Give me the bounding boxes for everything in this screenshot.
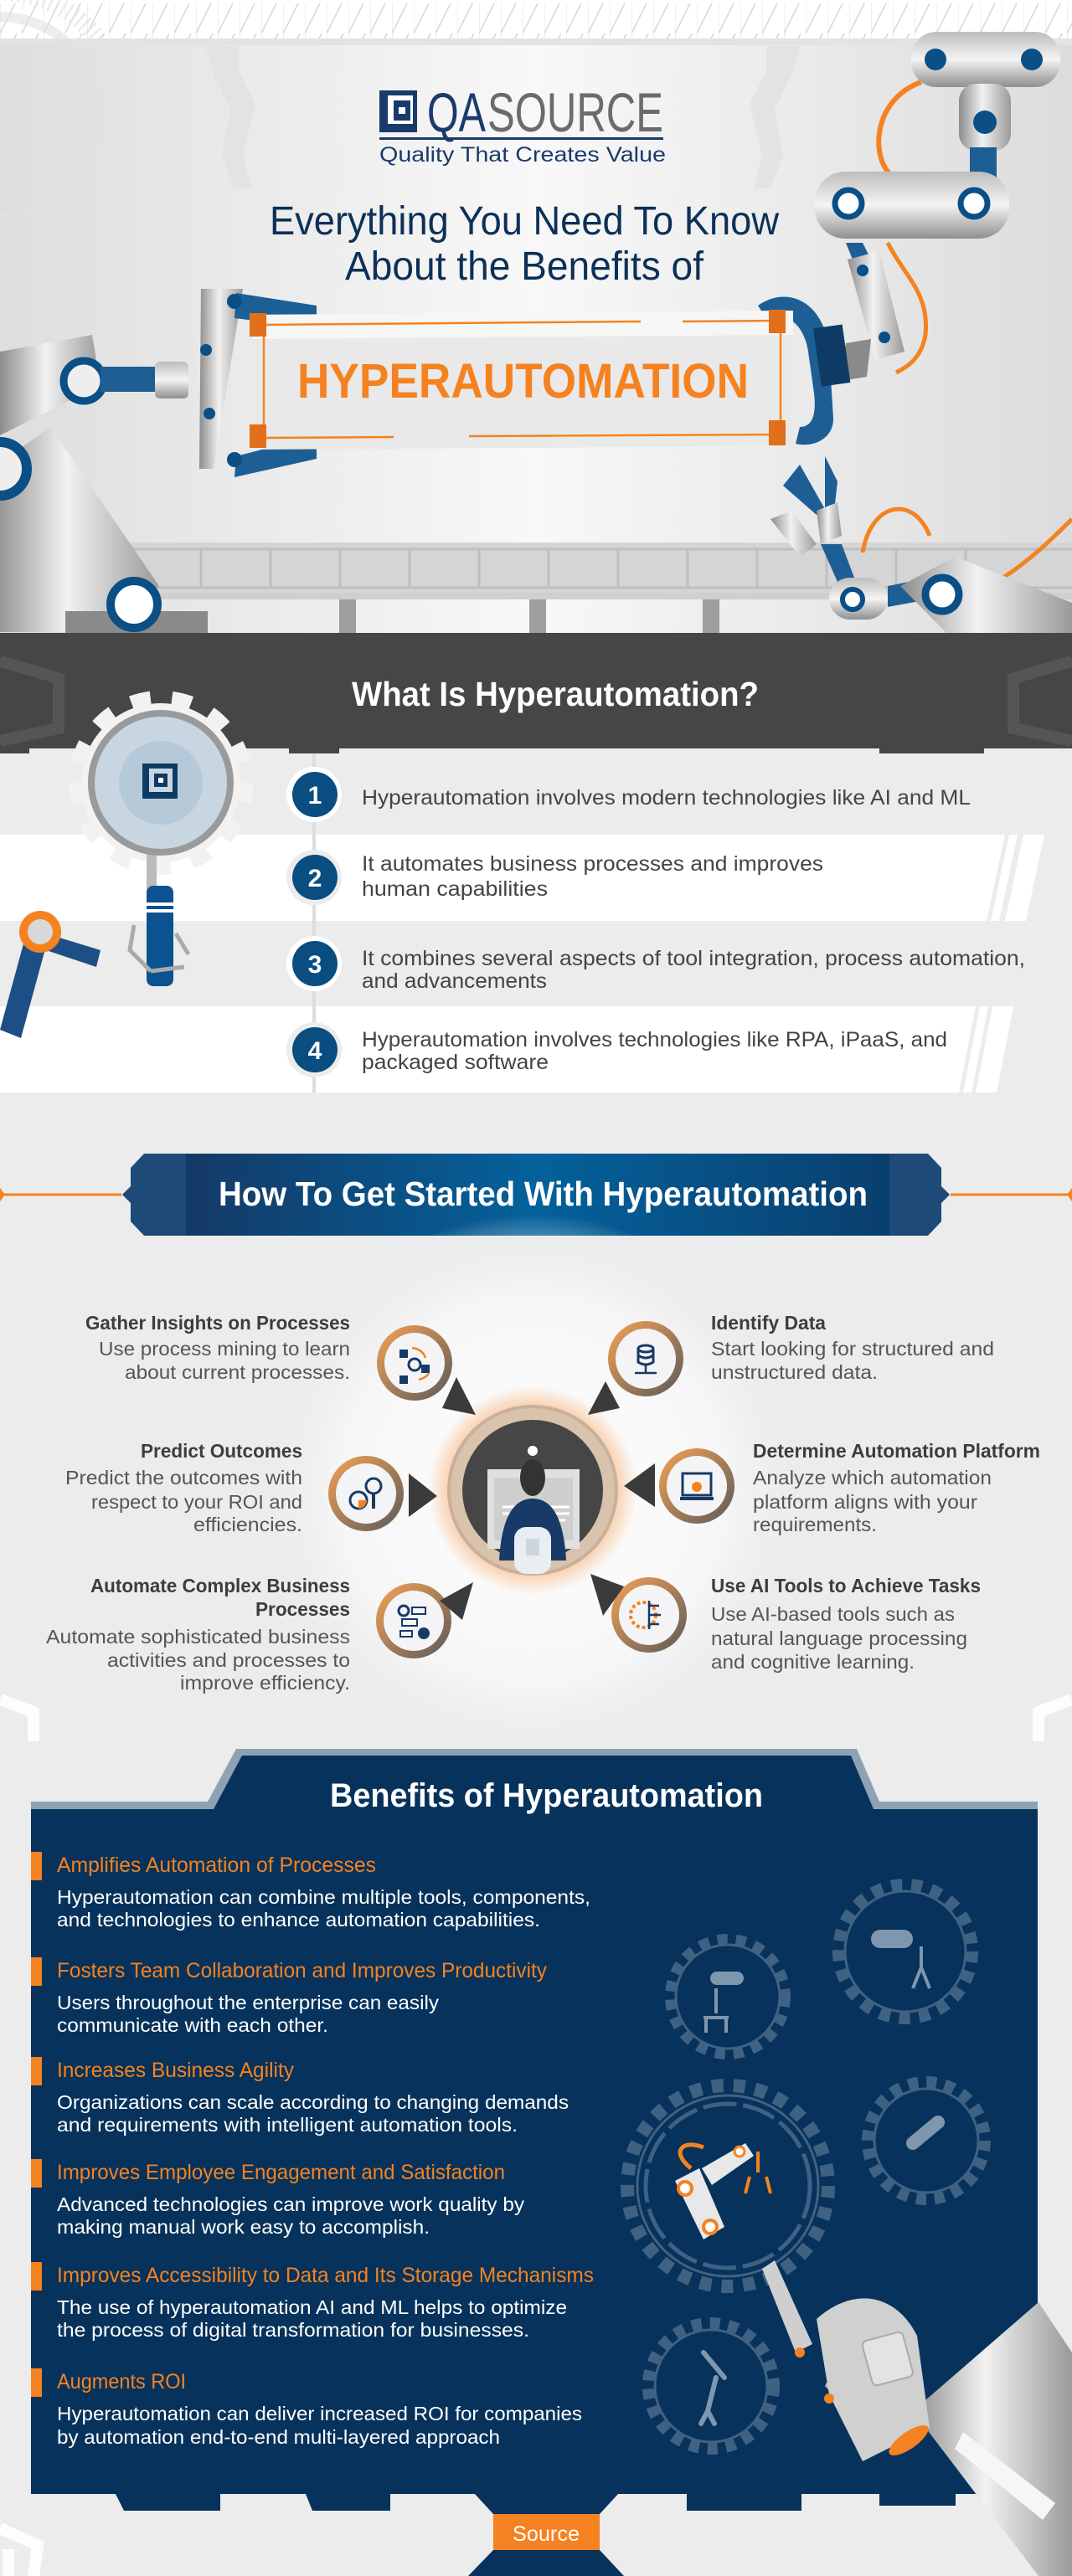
robot arm right top xyxy=(758,32,1060,445)
step icon: automation platform xyxy=(659,1448,734,1524)
arrow: identify to center xyxy=(588,1381,620,1415)
step text: automate complex: activities and processes to xyxy=(107,1649,350,1671)
title: Everything You Need To Know xyxy=(270,199,779,244)
benefit item 2: Users throughout the enterprise can easily xyxy=(57,1992,440,2013)
step text: AI tools: Use AI Tools to Achieve Tasks xyxy=(711,1575,981,1597)
benefit item 1: Amplifies Automation of Processes xyxy=(57,1854,376,1877)
benefit item 3: Organizations can scale according to changing demands xyxy=(57,2091,569,2113)
list item 2 xyxy=(286,850,823,905)
conveyor xyxy=(0,542,1072,633)
benefit item 6: by automation end-to-end multi-layered approach xyxy=(57,2426,500,2448)
source button xyxy=(468,2494,624,2576)
list item 4: packaged software xyxy=(362,1051,549,1074)
step icon: automate complex xyxy=(376,1583,451,1658)
benefit item 5: the process of digital transformation for businesses. xyxy=(57,2319,529,2341)
step text: automation platform: Determine Automation Platform xyxy=(753,1440,1040,1462)
benefit item 6 xyxy=(31,2368,582,2448)
step text: predict outcomes: Predict the outcomes with xyxy=(65,1467,302,1489)
step text: gather insights xyxy=(85,1312,350,1383)
step text: AI tools xyxy=(711,1575,981,1673)
arrow: AI to center xyxy=(590,1574,624,1616)
title: About the Benefits of xyxy=(345,244,704,289)
step text: predict outcomes: efficiencies. xyxy=(193,1514,302,1535)
step text: automate complex xyxy=(46,1575,350,1694)
step icon: identify data xyxy=(608,1321,683,1396)
robot hand xyxy=(762,2260,1072,2576)
benefit item 3: Increases Business Agility xyxy=(57,2059,294,2082)
banner: HYPERAUTOMATION: HYPERAUTOMATION xyxy=(297,354,749,409)
arrow: automate to center xyxy=(440,1582,473,1620)
list item 3 xyxy=(286,936,1025,993)
decorative corner logos xyxy=(0,1699,1072,2576)
heading banner: How To Get Started xyxy=(0,1154,1072,1236)
list item 2: It automates business processes and improves xyxy=(362,852,823,876)
step icon: gather insights xyxy=(377,1325,452,1401)
robot arm left xyxy=(0,289,317,633)
faded background robot silhouettes xyxy=(205,46,800,188)
benefit item 5: The use of hyperautomation AI and ML helps to optimize xyxy=(57,2296,567,2318)
step text: automate complex: Processes xyxy=(255,1598,350,1620)
benefit item 1: Hyperautomation can combine multiple tools, components, xyxy=(57,1886,590,1908)
list item 4 xyxy=(286,1022,947,1077)
icon: magnifier with gear and robot arm xyxy=(0,703,240,1038)
title xyxy=(270,199,779,289)
step text: automation platform: platform aligns with your xyxy=(753,1491,977,1513)
step text: predict outcomes: respect to your ROI and xyxy=(91,1491,302,1513)
step text: automate complex: improve efficiency. xyxy=(180,1672,350,1694)
section: What Is Hyperautomation xyxy=(0,633,1072,758)
header background xyxy=(0,0,1072,633)
top decorative strip xyxy=(0,0,1072,45)
step icon: AI tools xyxy=(611,1577,687,1653)
step text: predict outcomes xyxy=(65,1440,302,1535)
benefit item 2: Fosters Team Collaboration and Improves Productivity xyxy=(57,1959,547,1982)
step text: AI tools: natural language processing xyxy=(711,1627,967,1649)
step text: AI tools: and cognitive learning. xyxy=(711,1651,915,1673)
step text: gather insights: Gather Insights on Processes xyxy=(85,1312,350,1334)
list rows background xyxy=(0,753,1072,1155)
list item 3: and advancements xyxy=(362,969,547,993)
banner: HYPERAUTOMATION xyxy=(250,310,793,450)
logo xyxy=(379,81,666,167)
arrow: predict to center xyxy=(409,1473,437,1517)
step text: identify data: Start looking for structured and xyxy=(711,1338,994,1360)
faded background gear xyxy=(0,0,126,243)
glow background xyxy=(256,1214,809,1766)
arrow: gather to center xyxy=(442,1377,476,1415)
benefit item 4 xyxy=(31,2159,525,2238)
step text: predict outcomes: Predict Outcomes xyxy=(141,1440,302,1462)
robot arm right bottom with gripper xyxy=(770,456,1072,633)
logo: QA xyxy=(427,81,486,143)
step text: identify data xyxy=(711,1312,994,1383)
benefit item 4: making manual work easy to accomplish. xyxy=(57,2216,430,2238)
benefit item 5 xyxy=(31,2262,594,2341)
heading: Benefits of Hyperautomation: Benefits of Hyperautomation xyxy=(330,1777,763,1814)
step text: automate complex: Automate sophisticated business xyxy=(46,1626,350,1648)
heading: What Is Hyperautomation?: What Is Hyperautomation? xyxy=(352,675,759,713)
heading banner: How To Get Started: How To Get Started With Hyperautomation xyxy=(219,1175,868,1213)
benefit item 5: Improves Accessibility to Data and Its Storage Mechanisms xyxy=(57,2264,594,2287)
list item 1: 1 xyxy=(308,782,322,810)
source button: Source xyxy=(513,2522,580,2546)
gears illustration xyxy=(627,1884,985,2449)
benefit item 3: and requirements with intelligent automation tools. xyxy=(57,2114,518,2136)
benefit item 2 xyxy=(31,1957,547,2036)
panel: benefits xyxy=(31,1749,1038,2511)
list item 2: 2 xyxy=(308,865,322,892)
step text: automate complex: Automate Complex Business xyxy=(90,1575,350,1597)
benefit item 4: Improves Employee Engagement and Satisfaction xyxy=(57,2161,505,2184)
benefit item 3 xyxy=(31,2057,569,2136)
step text: automation platform: Analyze which automation xyxy=(753,1467,992,1489)
arrow: platform to center xyxy=(624,1463,655,1507)
step text: AI tools: Use AI-based tools such as xyxy=(711,1603,955,1625)
list item 4: 4 xyxy=(308,1037,322,1065)
benefit item 6: Augments ROI xyxy=(57,2370,186,2393)
step icon: predict outcomes xyxy=(328,1456,404,1531)
benefit item 2: communicate with each other. xyxy=(57,2014,328,2036)
benefit item 6: Hyperautomation can deliver increased ROI for companies xyxy=(57,2403,582,2424)
list item 3: 3 xyxy=(308,951,322,979)
step text: automation platform xyxy=(753,1440,1040,1535)
step text: identify data: unstructured data. xyxy=(711,1361,878,1383)
list item 1 xyxy=(286,767,971,822)
step text: gather insights: about current processes. xyxy=(125,1361,350,1383)
step text: automation platform: requirements. xyxy=(753,1514,877,1535)
benefit item 1: and technologies to enhance automation capabilities. xyxy=(57,1909,540,1931)
benefit item 4: Advanced technologies can improve work quality by xyxy=(57,2193,525,2215)
section background: steps xyxy=(0,1155,1072,1752)
list item 1: Hyperautomation involves modern technologies like AI and ML xyxy=(362,786,971,810)
benefit item 1 xyxy=(31,1852,590,1931)
list item 4: Hyperautomation involves technologies like RPA, iPaaS, and xyxy=(362,1028,947,1051)
logo: SOURCE xyxy=(487,81,663,143)
robot arm in central gear xyxy=(675,2143,770,2239)
list item 2: human capabilities xyxy=(362,877,548,901)
central figure xyxy=(428,1386,637,1595)
tagline: Quality That Creates Value xyxy=(379,143,666,167)
step text: identify data: Identify Data xyxy=(711,1312,826,1334)
step text: gather insights: Use process mining to learn xyxy=(99,1338,350,1360)
list item 3: It combines several aspects of tool integration, process automation, xyxy=(362,947,1025,970)
